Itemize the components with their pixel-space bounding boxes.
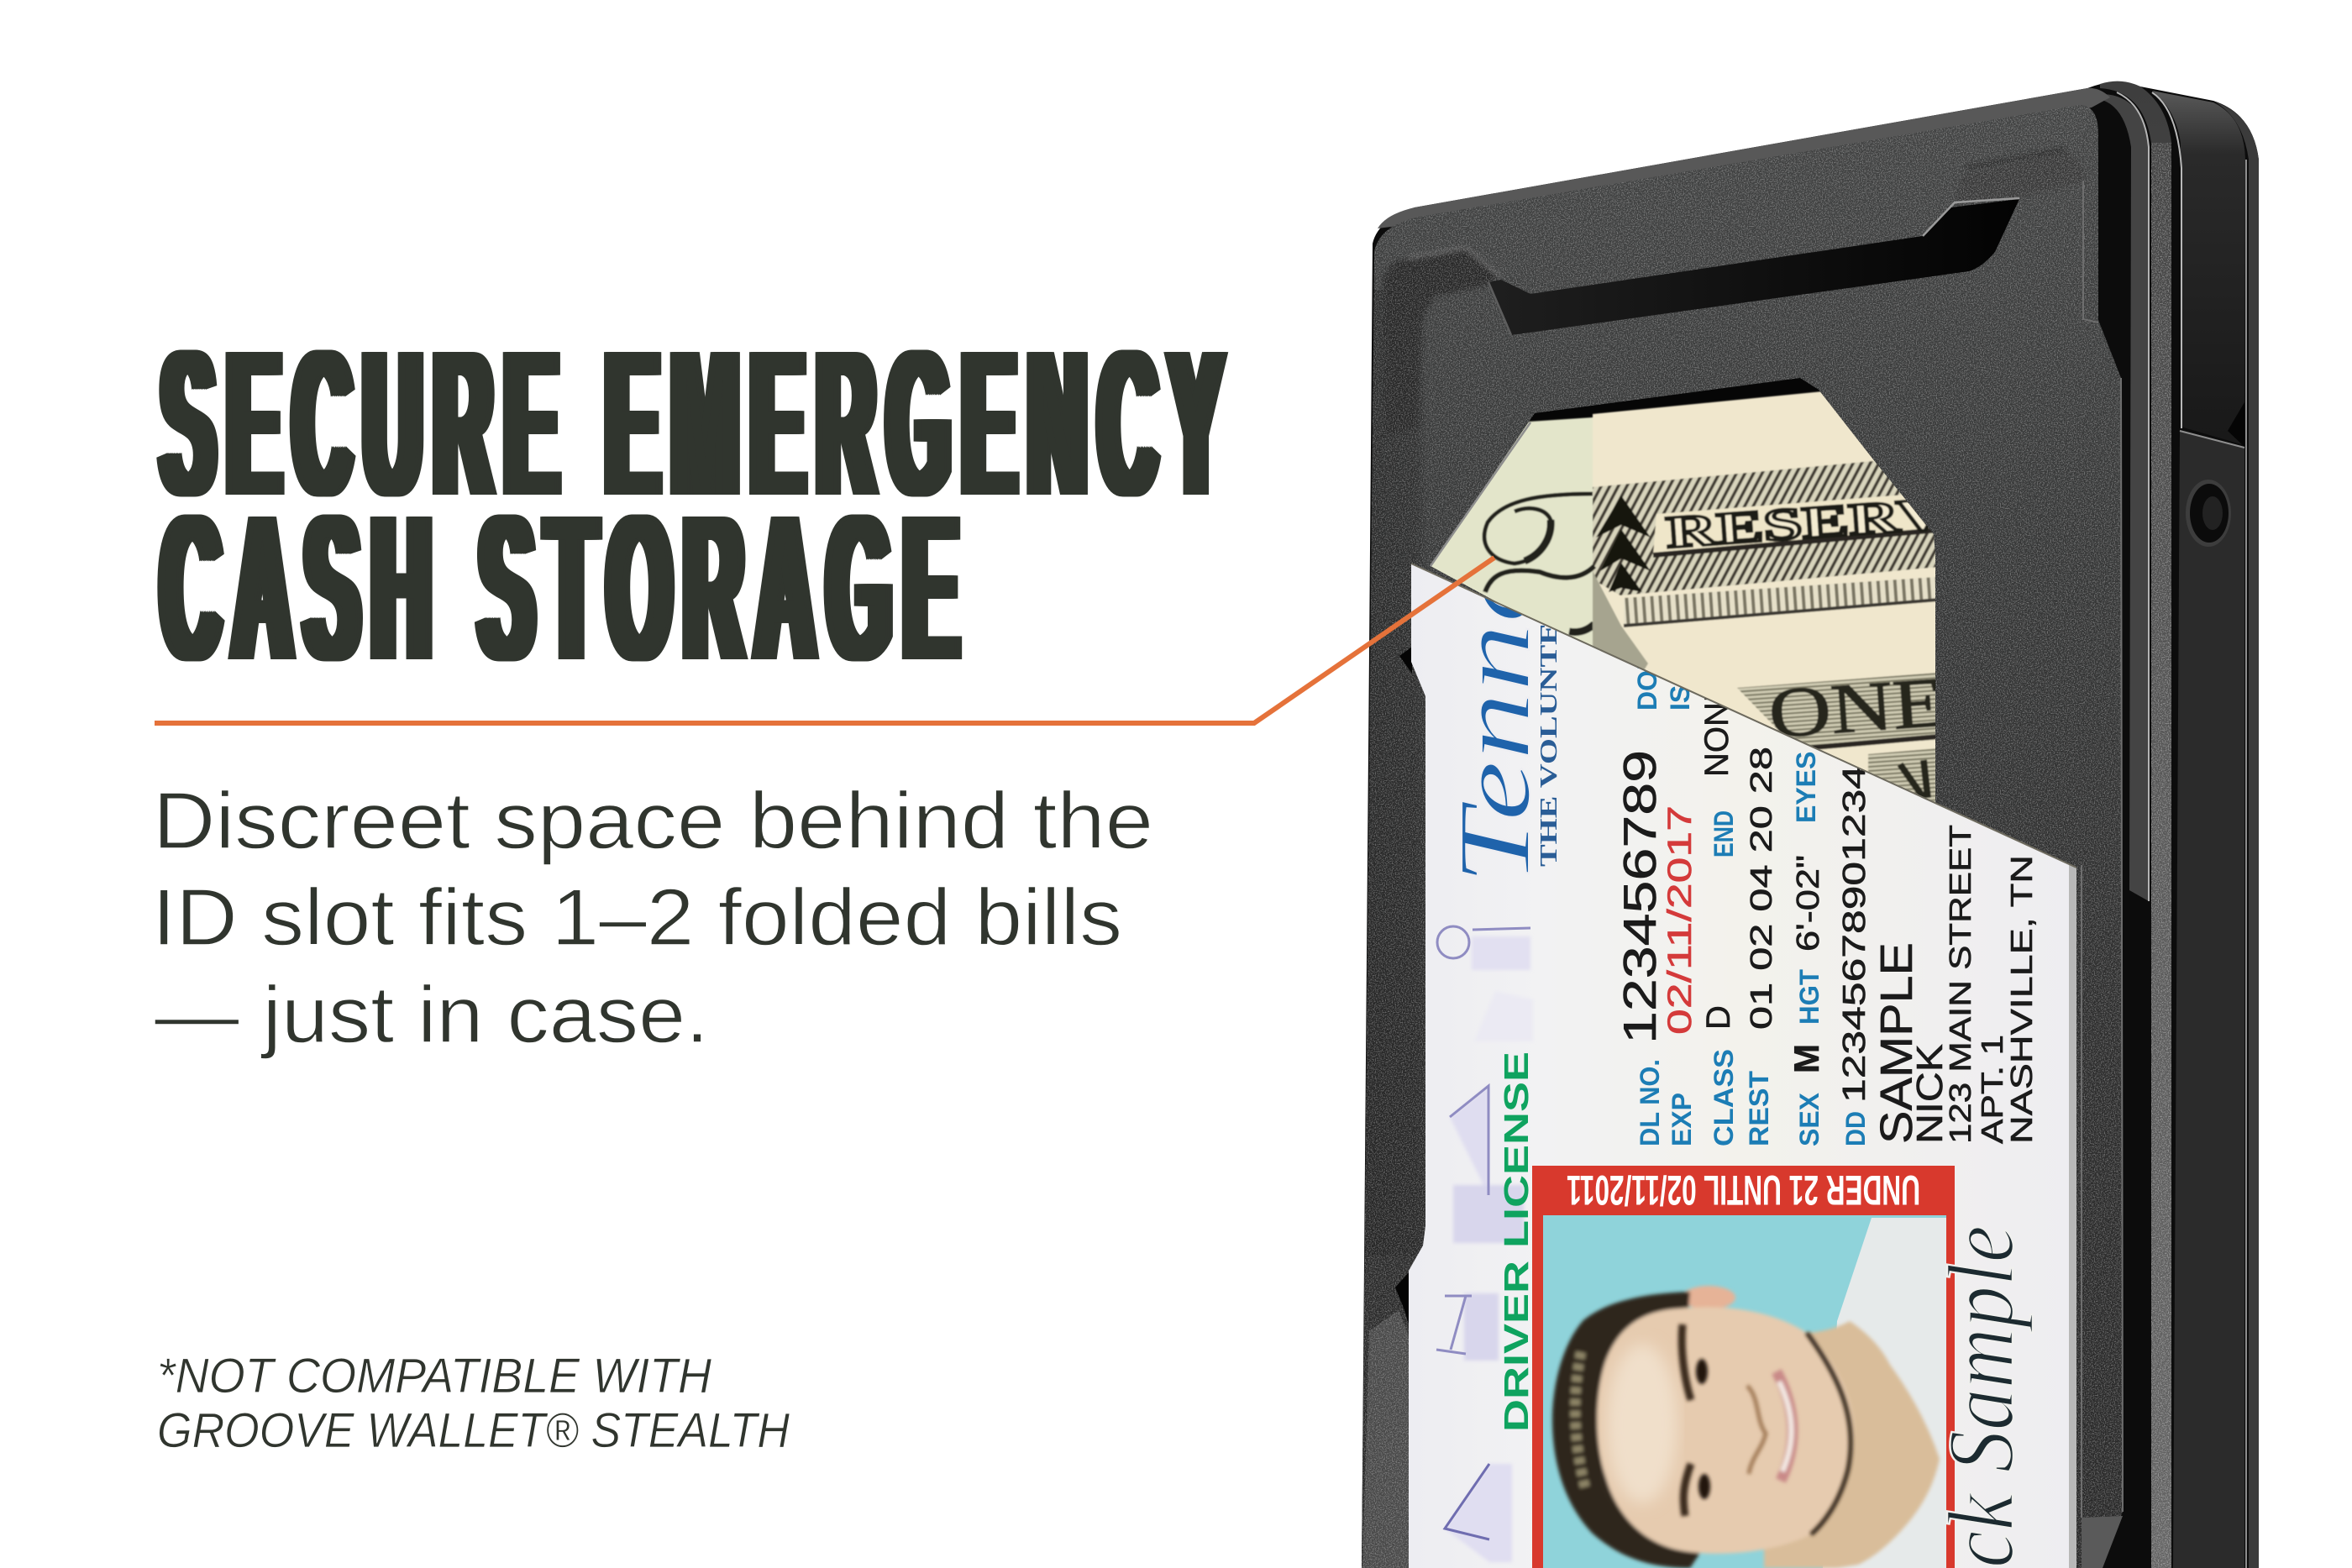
license data values: 123 MAIN STREET [1943, 825, 1977, 1144]
license data values: 01 02 04 20 28 [1744, 747, 1778, 1030]
license data values: D [1700, 1005, 1737, 1030]
hair [1552, 1292, 1705, 1568]
side button [2186, 480, 2231, 547]
title: SECURE EMERGENCY [161, 307, 1236, 539]
driver license label: DRIVER LICENSE [1497, 1051, 1536, 1432]
photo background [1543, 1215, 1946, 1568]
title [156, 307, 1236, 704]
license data values: M [1787, 1044, 1826, 1073]
signature: ck Sample [1929, 1225, 2034, 1568]
footnote [157, 1349, 790, 1458]
card diagonal edge [1411, 564, 2076, 868]
reserve plate [1652, 494, 1930, 553]
plate lower left bevel [1362, 1310, 1409, 1568]
license data labels: ISS [1665, 667, 1695, 711]
license data labels: CLASS [1709, 1049, 1739, 1146]
body text: Discreet space behind the [153, 776, 1153, 866]
license data values: 6'-02" [1791, 855, 1826, 952]
title: CASH STORAGE [161, 472, 971, 704]
bill numeral 2 [1484, 494, 1594, 632]
license data values: 123456789 [1614, 750, 1666, 1044]
license data labels: REST [1744, 1071, 1774, 1146]
top finger slot [1488, 198, 2019, 335]
metal strip [2104, 94, 2149, 901]
portrait of license holder [1552, 1286, 1940, 1568]
license data labels: DD [1840, 1111, 1871, 1146]
mouth [1777, 1371, 1793, 1481]
textured metal band [2100, 81, 2171, 1568]
footnote: *NOT COMPATIBLE WITH [157, 1349, 711, 1403]
cash window [1430, 378, 1935, 802]
card lavender artwork [1445, 936, 1533, 1562]
license data values: 02/11/2017 [1662, 805, 1698, 1035]
license data values: APT. 1 [1975, 1035, 2009, 1144]
guilloche chevrons [1596, 496, 1651, 592]
top rim of front plate [1378, 88, 2110, 228]
photo backdrop corner [1823, 1218, 1946, 1568]
nose [1747, 1386, 1766, 1474]
bill lower plate [1737, 672, 1949, 747]
notch shadows [1395, 647, 1412, 1324]
photo frame [1532, 1166, 1955, 1568]
neck [1764, 1321, 1940, 1568]
under 21 notice: UNDER 21 UNTIL 02/11/2011 [1567, 1167, 1920, 1214]
slot recess shading [1383, 149, 2085, 437]
body text [152, 776, 1153, 1060]
blond hair highlights [1575, 1352, 1586, 1491]
bill fold shadow [1593, 571, 1648, 680]
front plate face [1362, 105, 2123, 1568]
state motto: THE VOLUNTEER STATE [1535, 462, 1562, 867]
license data labels: END [1709, 810, 1739, 857]
eyes [1696, 1359, 1708, 1384]
license data values: NONE [1698, 679, 1735, 777]
license data labels: SEX [1794, 1092, 1824, 1146]
license data labels: EYES [1791, 752, 1821, 823]
license data values [1614, 679, 2039, 1144]
upper side panel [2152, 91, 2245, 445]
body text: — just in case. [155, 970, 709, 1060]
bill hatch strip [1624, 576, 1949, 624]
lower side panel [2173, 431, 2244, 1568]
jawline [1807, 1333, 1851, 1534]
license data labels: DL NO. [1635, 1059, 1665, 1146]
license data values: SAMPLE [1872, 942, 1922, 1144]
plate left rail shading [1368, 290, 1418, 919]
band grain [2151, 143, 2171, 1568]
license data labels [1632, 651, 1871, 1146]
state name script: Tennessee [1438, 333, 1551, 885]
license data labels: DOB [1632, 651, 1662, 711]
side panel wedge [2228, 402, 2244, 447]
reserve lettering: RESERV [1665, 488, 1949, 558]
forehead highlight [1607, 1344, 1677, 1503]
license data labels: EXP [1667, 1093, 1697, 1146]
callout leader line [155, 558, 1494, 723]
wallet back body [1362, 82, 2259, 1568]
guilloche band [1593, 460, 1949, 595]
driver license card [1409, 564, 2076, 1568]
grain texture [1362, 101, 2126, 1568]
folded two dollar bill [1431, 391, 1935, 803]
license data values: 12345678901234 [1837, 765, 1872, 1103]
ear [1682, 1286, 1735, 1309]
side rim [2214, 102, 2259, 1568]
plate right lower bevel [2082, 1516, 2123, 1568]
license data values: NASHVILLE, TN [2004, 855, 2039, 1144]
body text: ID slot fits 1–2 folded bills [152, 873, 1122, 962]
license data values: NICK [1909, 1044, 1950, 1144]
wallet product illustration [1357, 81, 2259, 1568]
folded two dollar bill: ONE [1767, 663, 1948, 753]
license data labels: HGT [1794, 969, 1824, 1025]
footnote: GROOVE WALLET® STEALTH [157, 1403, 790, 1458]
face [1597, 1307, 1854, 1554]
eyebrows [1682, 1324, 1691, 1516]
